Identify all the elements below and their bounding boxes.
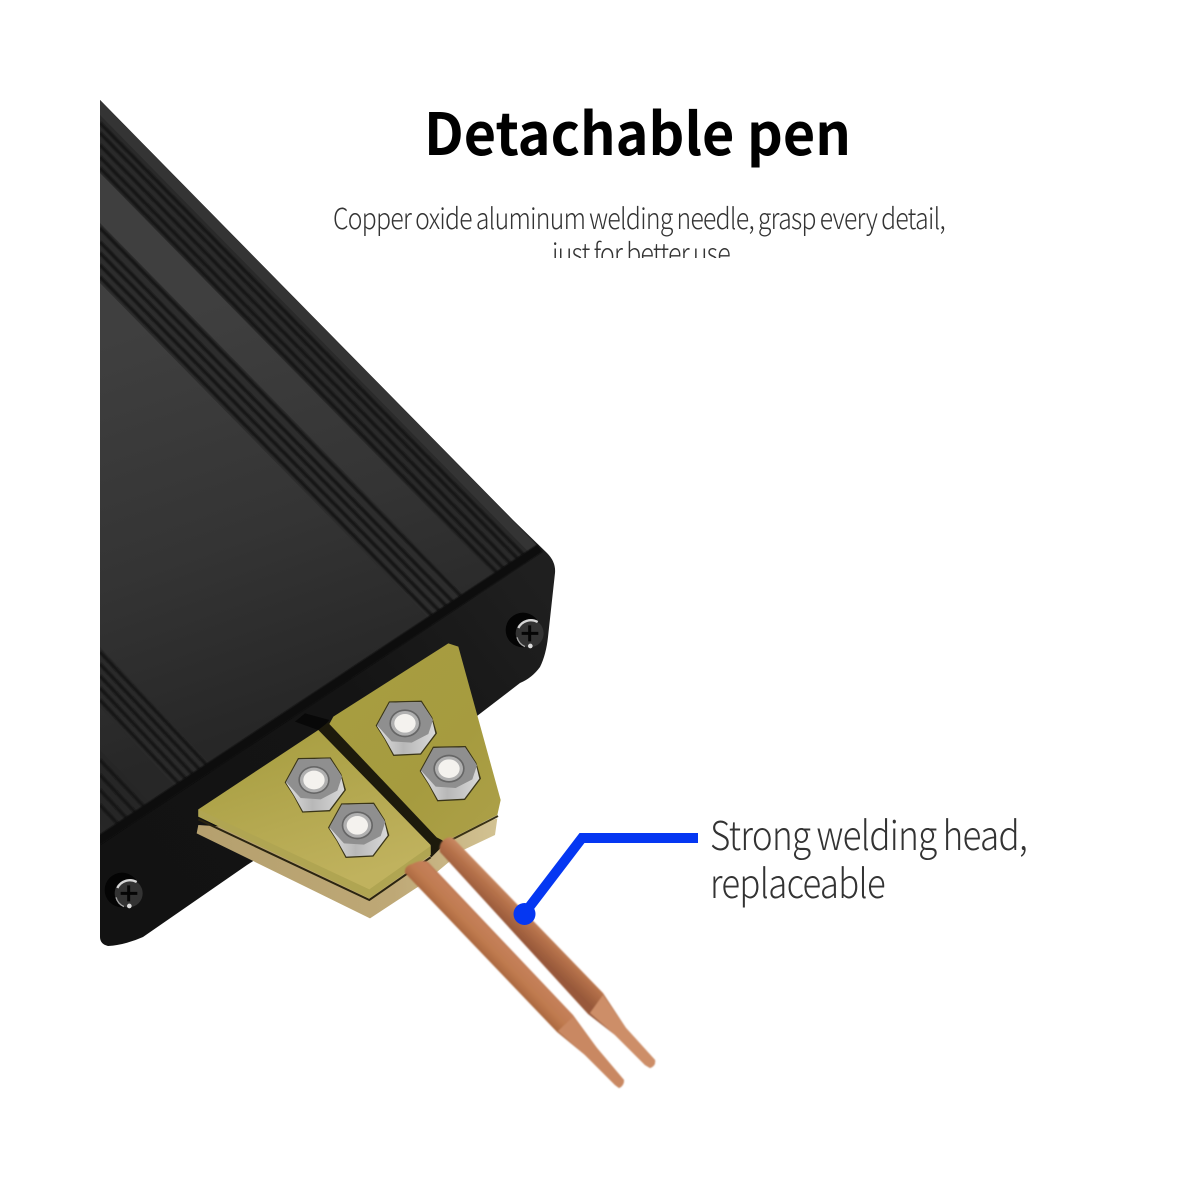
subtitle text block: [334, 206, 944, 258]
right brass plate: [329, 643, 501, 842]
subtitle text block: just for better use: [550, 231, 730, 273]
subtitle text block: Copper oxide aluminum welding needle, grasp every detail,: [333, 196, 945, 238]
nut 1 left plate: [285, 757, 346, 813]
nut 2 right plate: [420, 746, 481, 801]
left plate shadow line: [198, 819, 431, 900]
screw left: [105, 873, 143, 908]
title: Detachable pen: [424, 88, 851, 172]
right plate shadow line: [443, 816, 498, 844]
right needle: [440, 837, 655, 1068]
left needle tip: [558, 1017, 624, 1088]
nut 2 left plate: [328, 803, 389, 858]
screw right: [506, 613, 544, 648]
front edge bevel: [98, 548, 540, 841]
enclosure top surface with grooves: [100, 100, 536, 834]
gap between plates: [317, 721, 445, 857]
enclosure front face: [100, 100, 555, 946]
device: black aluminium enclosure: [100, 100, 556, 946]
callout text: replaceable: [710, 852, 885, 910]
welding head plates: [197, 643, 501, 918]
nut 1 right plate: [376, 701, 437, 756]
copper welding needles: [405, 837, 655, 1088]
notch shadow: [295, 713, 329, 731]
callout leader line: [514, 838, 698, 925]
left needle: [405, 861, 624, 1088]
right needle tip: [590, 995, 655, 1068]
left brass plate: [198, 730, 431, 898]
callout text: Strong welding head,: [710, 804, 1027, 862]
lower brass plate: [197, 818, 497, 918]
left plate lower edge: [198, 809, 431, 898]
callout text: [710, 804, 1027, 910]
